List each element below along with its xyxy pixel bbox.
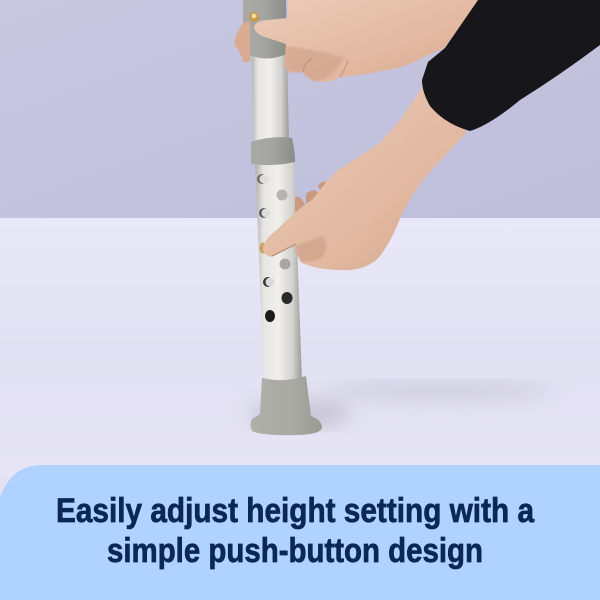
top hand (235, 0, 478, 82)
caption panel (0, 465, 600, 600)
middle collar (251, 137, 295, 165)
adjustable leg (243, 0, 322, 435)
caption text: simple push-button design (107, 532, 483, 570)
panel background (0, 465, 600, 600)
foot shadow on table (248, 383, 555, 428)
finger shading (285, 46, 345, 81)
rubber foot (250, 376, 322, 435)
hand body (254, 0, 478, 82)
caption text: Easily adjust height setting with a (56, 492, 535, 530)
lower arm and hand (263, 88, 467, 270)
hidden fingers behind tube (295, 181, 327, 212)
top collar with brass button (243, 0, 287, 58)
photo background: table surface (0, 218, 600, 478)
fingers behind collar (235, 22, 250, 62)
brass button lower (260, 242, 266, 254)
lower tube (255, 160, 302, 380)
black sleeve (422, 0, 600, 131)
adjustment holes (257, 174, 292, 322)
photo background: wall (0, 0, 600, 219)
upper tube (251, 50, 289, 140)
